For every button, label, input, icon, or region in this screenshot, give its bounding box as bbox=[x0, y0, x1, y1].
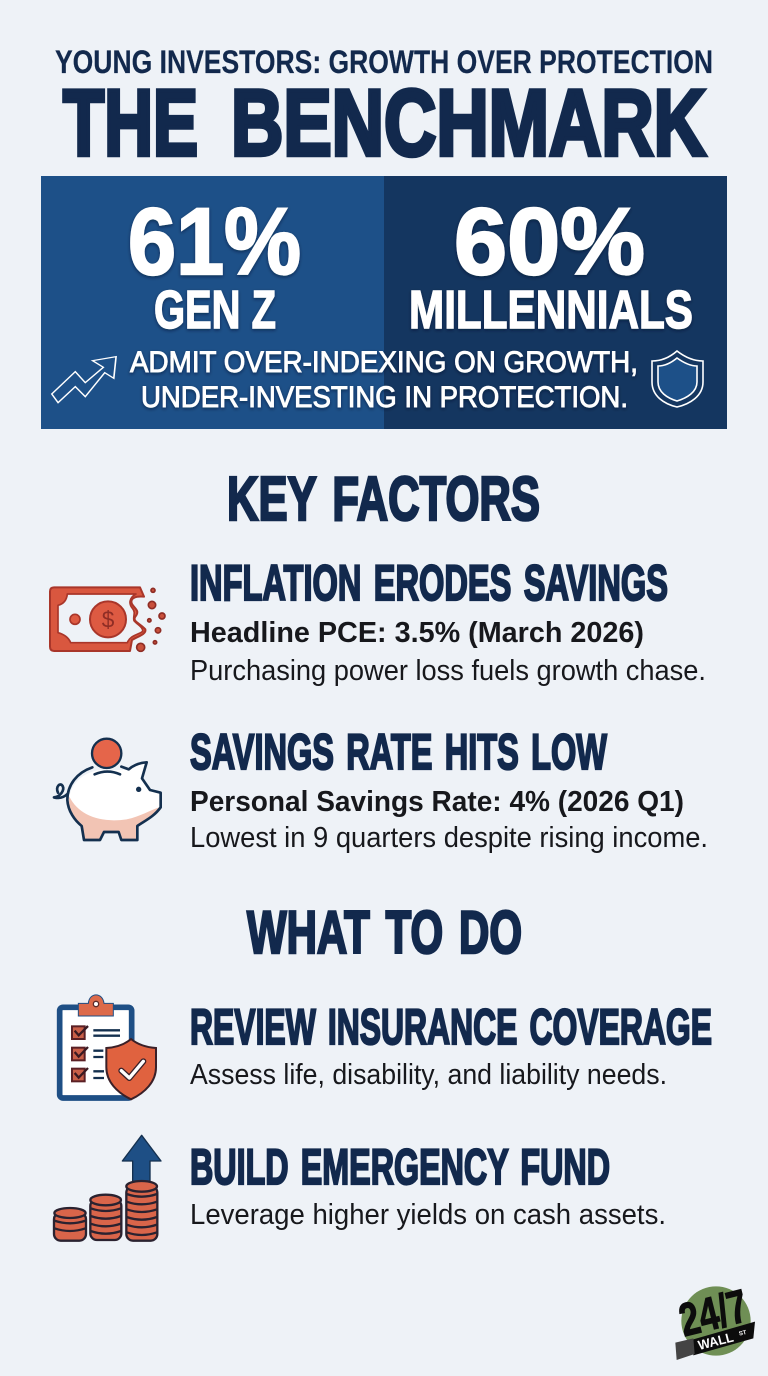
stat: Gen Z 61%: GEN Z bbox=[154, 280, 276, 340]
benchmark caption: ADMIT OVER-INDEXING ON GROWTH, bbox=[130, 346, 638, 379]
stat: Millennials 60% bbox=[409, 189, 693, 340]
factor description: Purchasing power loss fuels growth chase. bbox=[190, 655, 706, 687]
panel: benchmark statistics bbox=[41, 176, 727, 429]
stat: Gen Z 61%: 61% bbox=[128, 189, 301, 295]
icon: coin stacks with up arrow bbox=[54, 1135, 161, 1241]
logo: 24/7 Wall St: ST bbox=[738, 1330, 748, 1338]
action: review insurance coverage bbox=[60, 995, 712, 1099]
factor: inflation erodes savings bbox=[50, 555, 706, 687]
icon: eroding banknote bbox=[50, 587, 165, 651]
icon: clipboard with shield bbox=[60, 995, 156, 1099]
action description: Assess life, disability, and liability needs. bbox=[190, 1059, 667, 1091]
factor statistic: Personal Savings Rate: 4% (2026 Q1) bbox=[190, 786, 684, 818]
benchmark caption: UNDER-INVESTING IN PROTECTION. bbox=[141, 381, 628, 414]
factor: savings rate hits low bbox=[54, 724, 708, 854]
action: build emergency fund bbox=[54, 1135, 666, 1241]
heading: key factors: KEY FACTORS bbox=[227, 465, 540, 534]
logo: 24/7 Wall St: WALL bbox=[696, 1330, 735, 1353]
icon: piggy bank bbox=[54, 739, 161, 840]
stat: Millennials 60%: 60% bbox=[454, 189, 645, 295]
icon: eroding banknote: $ bbox=[102, 606, 115, 632]
logo: 24/7 Wall St bbox=[674, 1279, 755, 1360]
factor statistic: Headline PCE: 3.5% (March 2026) bbox=[190, 617, 644, 649]
stat: Gen Z 61% bbox=[128, 189, 301, 340]
icon: shield bbox=[652, 351, 703, 407]
action description: Leverage higher yields on cash assets. bbox=[190, 1199, 666, 1231]
title: THE bbox=[63, 70, 198, 175]
stat: Millennials 60%: MILLENNIALS bbox=[409, 280, 693, 340]
factor description: Lowest in 9 quarters despite rising income. bbox=[190, 822, 708, 854]
heading: what to do: WHAT TO DO bbox=[247, 899, 522, 966]
title bbox=[63, 70, 706, 175]
icon: rising arrow bbox=[52, 357, 116, 403]
benchmark caption bbox=[130, 346, 638, 414]
